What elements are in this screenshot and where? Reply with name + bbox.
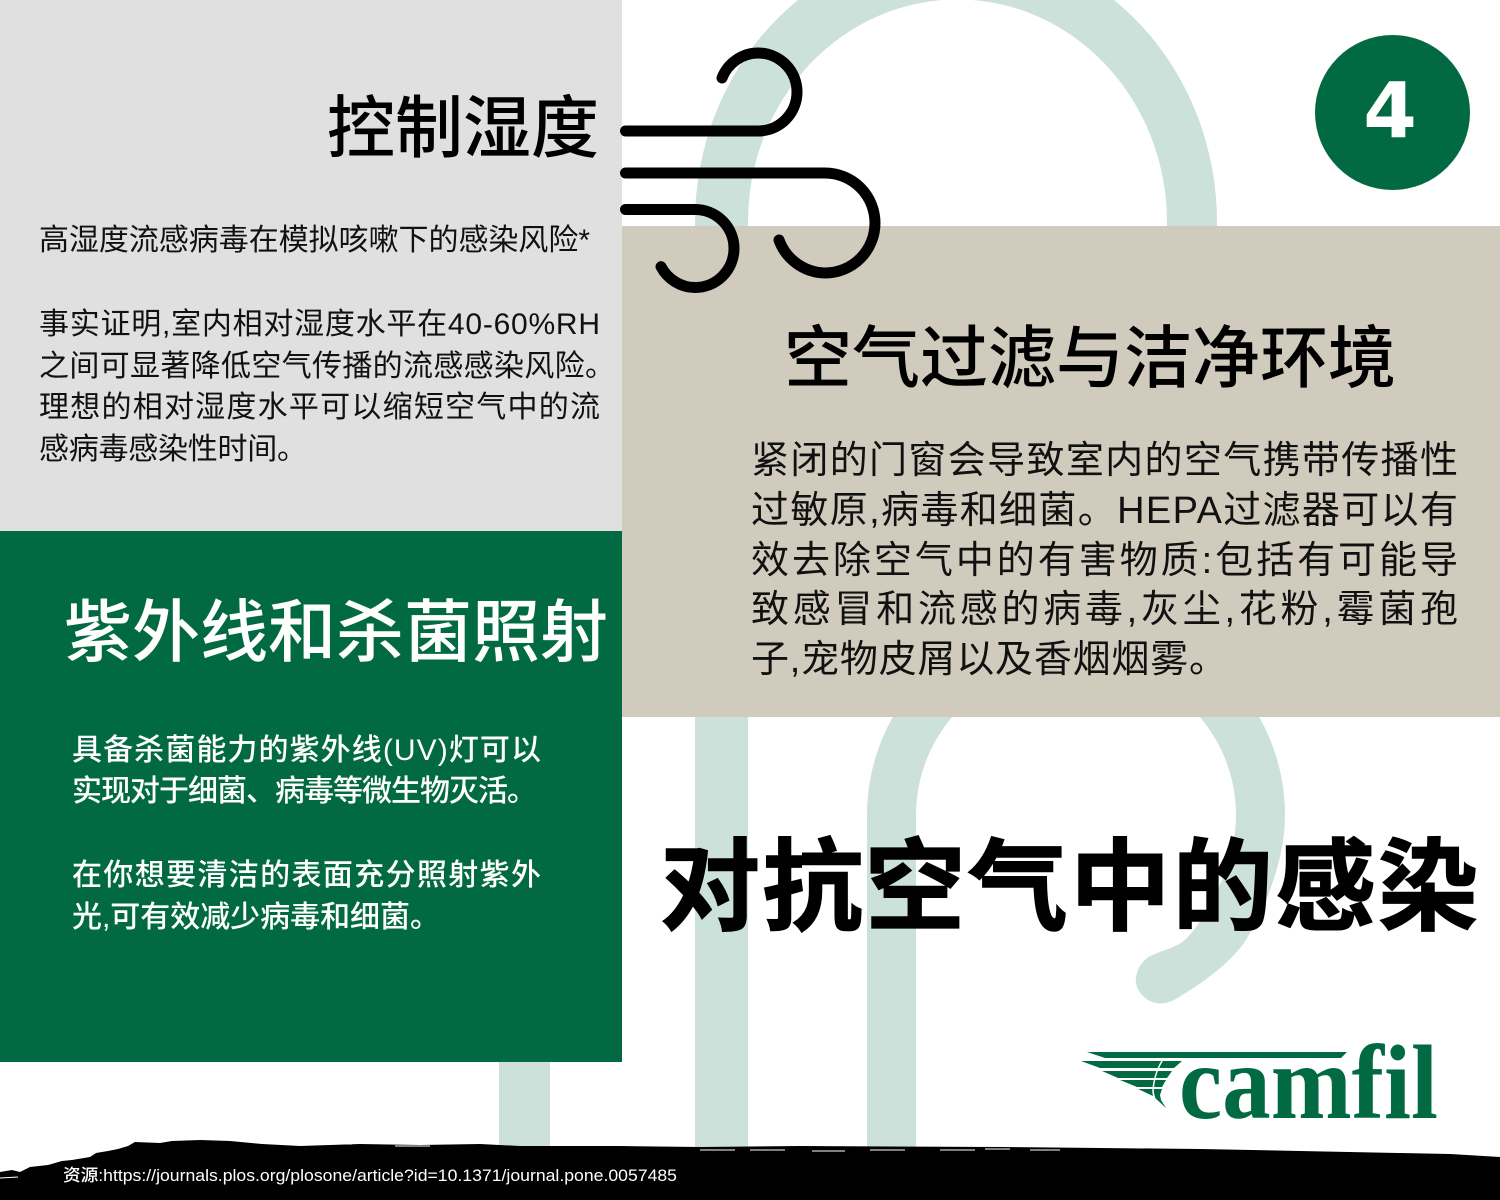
text: air filtration body bbox=[751, 440, 1458, 681]
text: humidity subtitle: 高湿度流感病毒在模拟咳嗽下的感染风险* bbox=[39, 224, 590, 257]
logo: camfil bbox=[1081, 1024, 1438, 1141]
text: humidity body: 理想的相对湿度水平可以缩短空气中的流 bbox=[39, 391, 600, 424]
text: air filtration body: 致感冒和流感的病毒,灰尘,花粉,霉菌孢 bbox=[751, 589, 1458, 631]
heading: UV: 紫外线和杀菌照射 bbox=[64, 595, 608, 671]
text: air filtration body: 紧闭的门窗会导致室内的空气携带传播性 bbox=[751, 440, 1458, 482]
badge: number 4: 4 bbox=[1363, 67, 1417, 156]
text: humidity body bbox=[39, 308, 615, 466]
heading: air filtration: 空气过滤与洁净环境 bbox=[784, 321, 1396, 397]
text: air filtration body: 过敏原,病毒和细菌。HEPA过滤器可以有 bbox=[751, 490, 1458, 532]
heading: humidity: 控制湿度 bbox=[327, 91, 599, 167]
text: UV body 2 bbox=[72, 859, 541, 934]
text: humidity body: 之间可显著降低空气传播的流感感染风险。 bbox=[39, 350, 615, 383]
panel: humidity bbox=[0, 0, 622, 531]
footer: source: 资源:https://journals.plos.org/plosone/article?id=10.1371/journal.pone.0057485 bbox=[63, 1166, 677, 1185]
background: pale green wind icon bbox=[499, 0, 1285, 1170]
text: humidity body: 感病毒感染性时间。 bbox=[39, 433, 307, 466]
panel: air filtration bbox=[622, 226, 1500, 717]
main title: 对抗空气中的感染 bbox=[660, 832, 1478, 944]
icon: wind bbox=[626, 53, 875, 288]
text: UV body 1: 具备杀菌能力的紫外线(UV)灯可以 bbox=[72, 734, 541, 767]
logo: camfil: camfil bbox=[1179, 1024, 1438, 1141]
text: UV body 2: 在你想要清洁的表面充分照射紫外 bbox=[72, 859, 541, 892]
text: UV body 1: 实现对于细菌、病毒等微生物灭活。 bbox=[72, 775, 537, 808]
footer: brush band bbox=[0, 1140, 1500, 1200]
text: UV body 1 bbox=[72, 734, 541, 808]
panel: UV bbox=[0, 531, 622, 1062]
text: UV body 2: 光,可有效减少病毒和细菌。 bbox=[72, 901, 440, 934]
text: air filtration body: 效去除空气中的有害物质:包括有可能导 bbox=[751, 540, 1458, 582]
text: air filtration body: 子,宠物皮屑以及香烟烟雾。 bbox=[751, 639, 1227, 681]
badge: number 4 bbox=[1315, 35, 1470, 190]
text: humidity body: 事实证明,室内相对湿度水平在40-60%RH bbox=[39, 308, 600, 341]
